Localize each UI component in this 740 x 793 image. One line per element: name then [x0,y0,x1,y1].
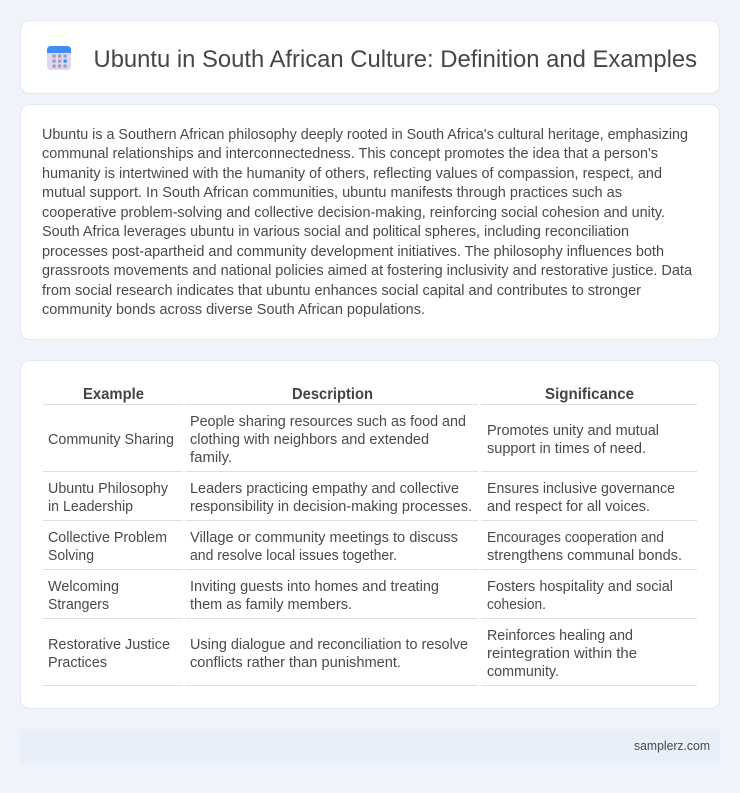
text block: ubuntu description [42,127,692,318]
table row: community sharing: support in times of need. [487,441,646,457]
table row: collective problem solving: Solving [48,548,94,564]
table row: community sharing: Promotes unity and mutual [487,423,659,439]
table row: restorative justice practices: conflicts rather than punishment. [190,655,401,671]
table row: ubuntu philosophy in leadership: Ubuntu Philosophy [48,481,169,497]
table row: restorative justice practices: Reinforces healing and [487,628,633,644]
table row: welcoming strangers: them as family members. [190,597,352,613]
table row: collective problem solving: Village or community meetings to discuss [190,530,458,546]
text block: ubuntu description: community bonds across diverse South African populations. [42,302,425,318]
table header row: Significance [545,386,634,403]
table row: restorative justice practices: Practices [48,655,107,671]
table row: welcoming strangers: Fosters hospitality and social [487,579,673,595]
table row: restorative justice practices: community. [487,664,559,680]
table row: collective problem solving: Collective Problem [48,530,167,546]
table row: restorative justice practices: Using dialogue and reconciliation to resolve [190,637,468,653]
table row: collective problem solving: strengthens communal bonds. [487,548,682,564]
table row: welcoming strangers: Strangers [48,597,109,613]
table row: restorative justice practices [43,628,697,686]
table row: community sharing: People sharing resources such as food and [190,414,466,430]
table row: welcoming strangers: cohesion. [487,597,546,613]
table row: community sharing: clothing with neighbors and extended [190,432,429,448]
text block: ubuntu description: humanity is intertwined with the humanity of others, reflecting values of compassion, respect, and [42,166,662,182]
table header row [43,386,697,405]
text block: ubuntu description: communal relationships and interconnectedness. This concept promotes the idea that a person's [42,146,658,162]
title: Ubuntu in South African Culture: Definition and Examples [94,46,697,73]
table row: ubuntu philosophy in leadership: responsibility in decision-making processes. [190,499,472,515]
text block: ubuntu description: cooperative problem-solving and collective decision-making, reinforcing social cohesion and unity. [42,205,665,221]
table row: collective problem solving: Encourages cooperation and [487,530,664,546]
table row: restorative justice practices: reintegration within the [487,646,637,662]
footer source text: samplerz.com [634,739,710,753]
table row: collective problem solving [43,530,697,570]
table header row: Example [83,386,144,403]
text block: ubuntu description: Ubuntu is a Southern African philosophy deeply rooted in South Africa's cultural heritage, emphasizing [42,127,688,143]
table row: restorative justice practices: Restorative Justice [48,637,170,653]
table row: ubuntu philosophy in leadership: in Leadership [48,499,133,515]
table row: community sharing: Community Sharing [48,432,174,448]
footer bar [20,729,720,763]
text block: ubuntu description: grassroots movements and national policies aimed at fostering inclusivity and restorative justice. Data [42,263,692,279]
table row: collective problem solving: and resolve local issues together. [190,548,397,564]
icon: calendar [47,46,71,70]
table row: community sharing [43,414,697,472]
table row: welcoming strangers: Welcoming [48,579,119,595]
table row: welcoming strangers: Inviting guests into homes and treating [190,579,439,595]
table row: welcoming strangers [43,579,697,619]
table row: community sharing: family. [190,450,232,466]
table row: ubuntu philosophy in leadership [43,481,697,521]
table row: ubuntu philosophy in leadership: and respect for all voices. [487,499,650,515]
panel: title header [20,20,720,94]
text block: ubuntu description: mutual support. In South African communities, ubuntu manifests through practices such as [42,185,622,201]
table row: ubuntu philosophy in leadership: Leaders practicing empathy and collective [190,481,459,497]
text block: ubuntu description: processes post-apartheid and community development initiatives. The philosophy influences both [42,244,664,260]
text block: ubuntu description: from social research indicates that ubuntu enhances social capital and contributes to stronger [42,283,641,299]
table row: ubuntu philosophy in leadership: Ensures inclusive governance [487,481,675,497]
text block: ubuntu description: South Africa leverages ubuntu in various social and political spheres, including reconciliation [42,224,629,240]
panel: examples table [20,360,720,708]
table header row: Description [292,386,373,403]
panel: intro paragraph [20,104,720,340]
